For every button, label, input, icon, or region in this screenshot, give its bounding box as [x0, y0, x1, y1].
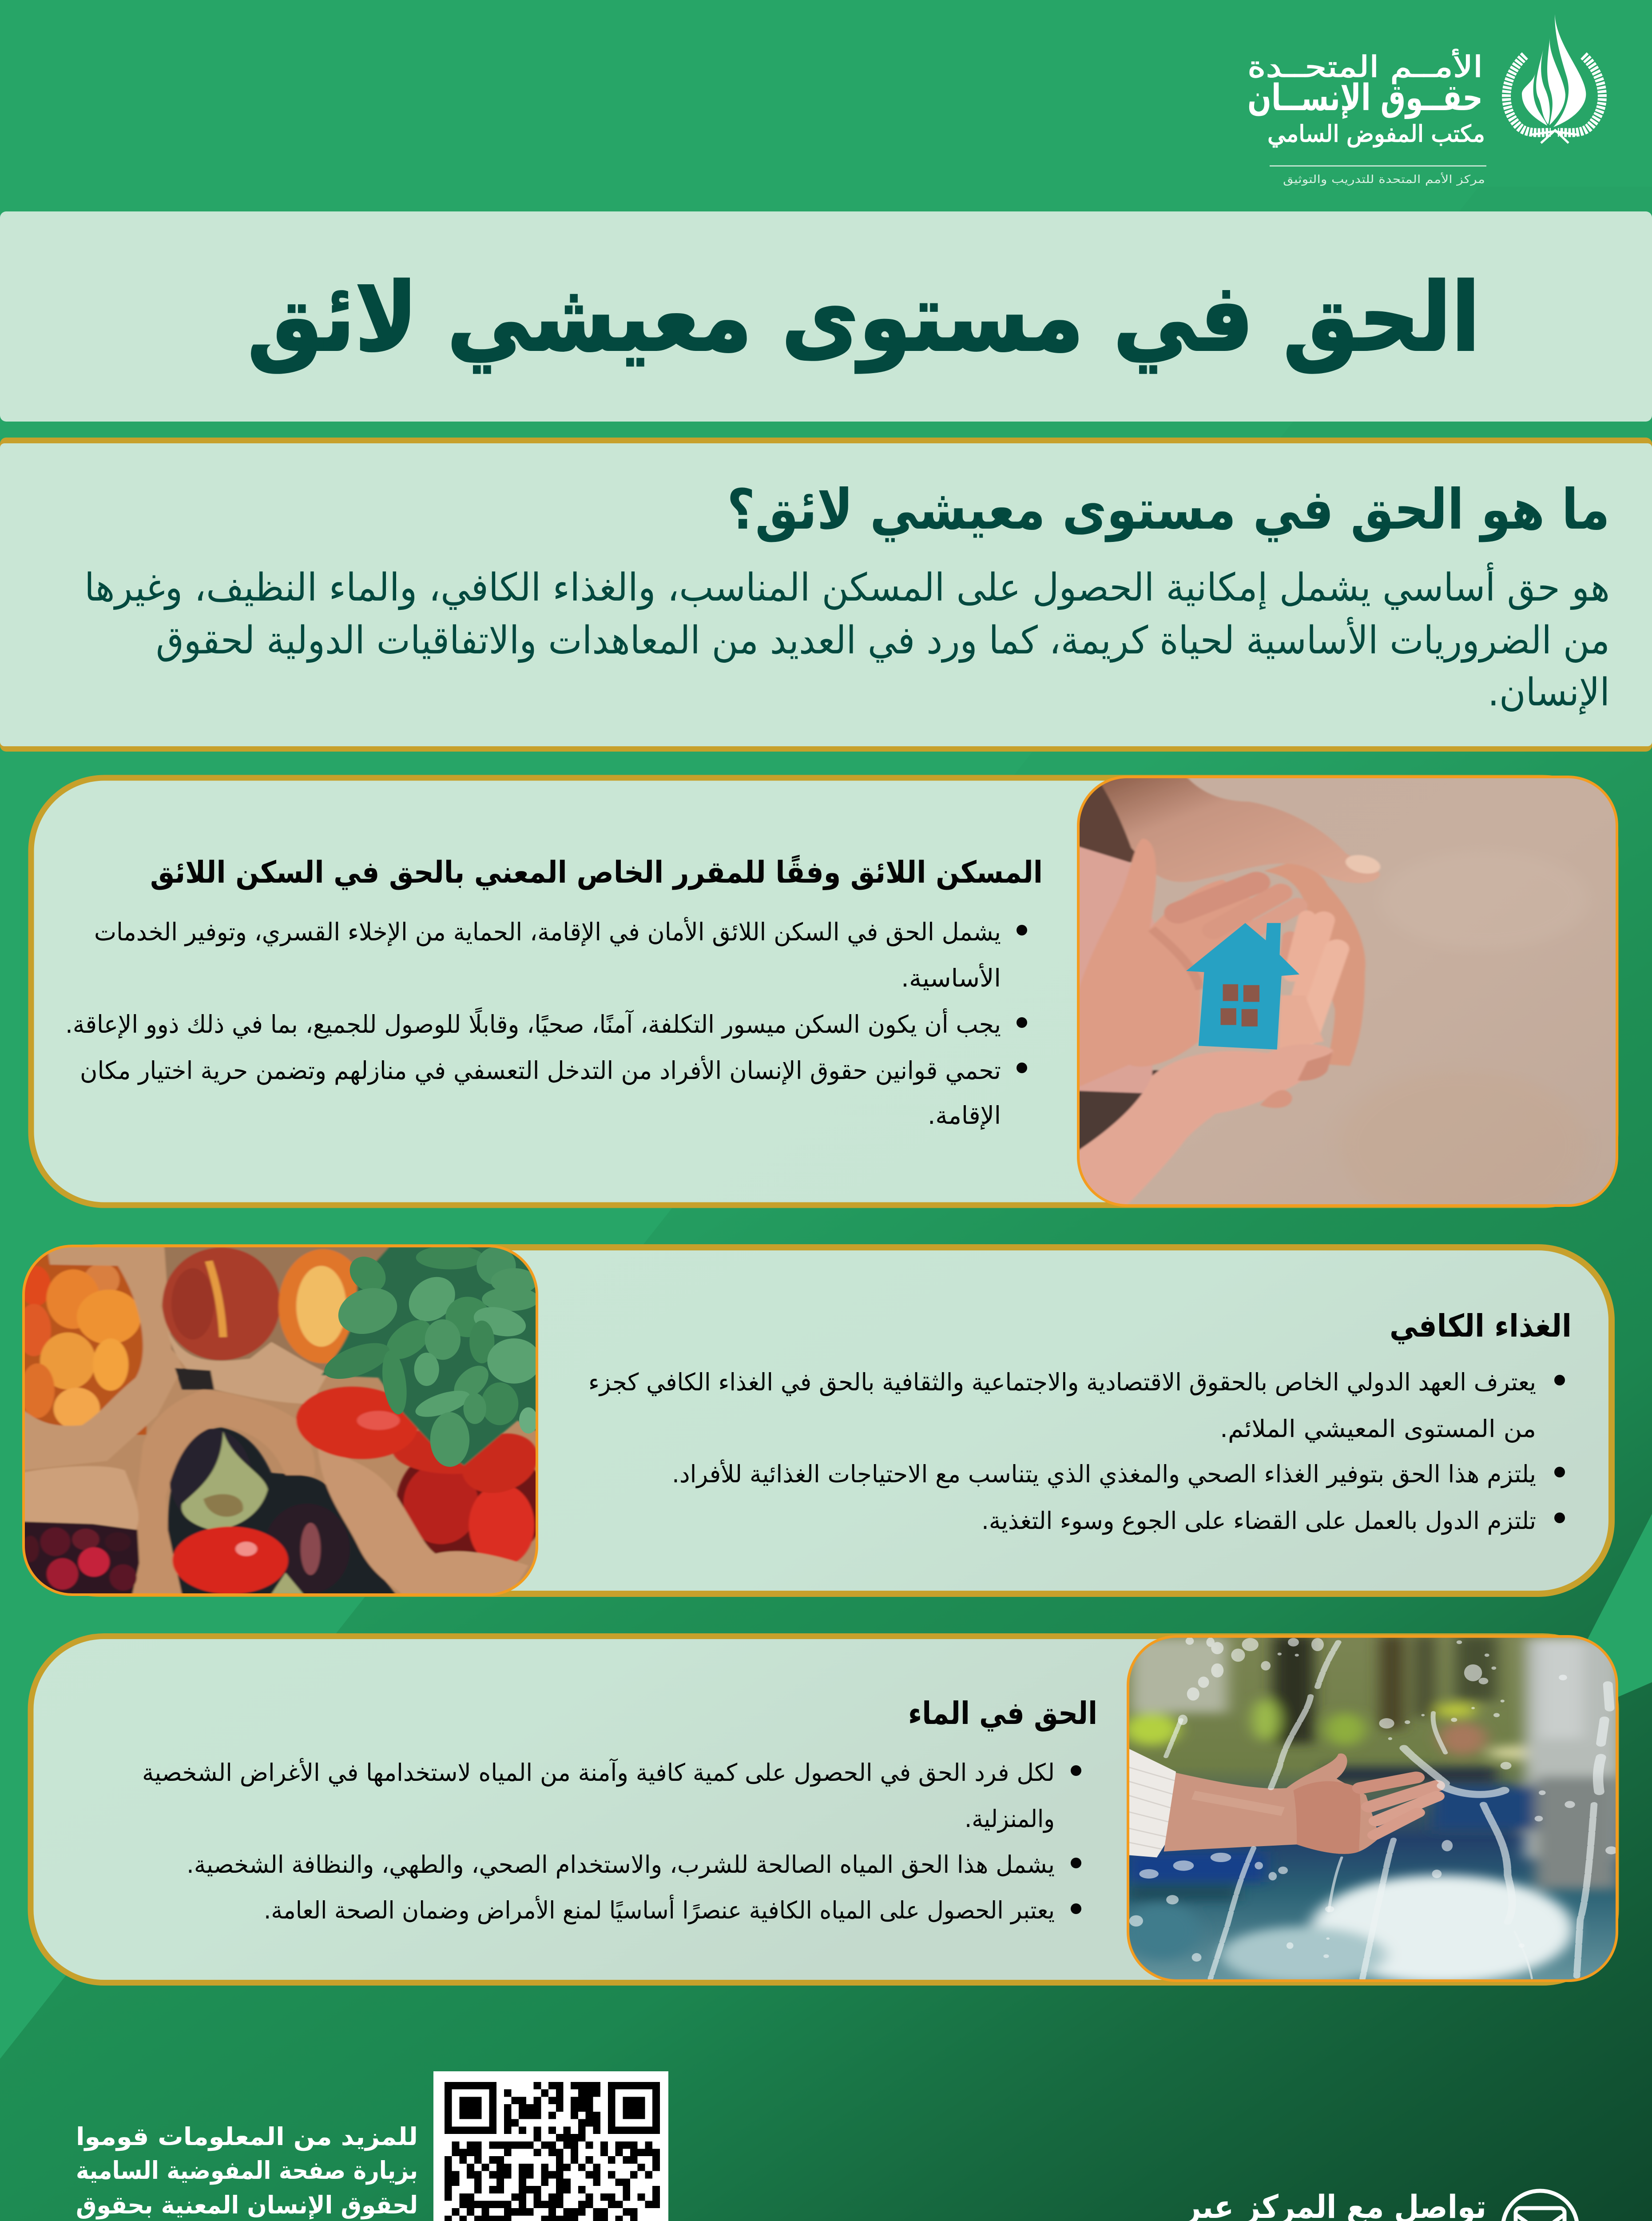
heading: right to water: الحق في الماء	[908, 1695, 1097, 1731]
text block: definition	[84, 562, 1610, 715]
bullet list: water: لكل فرد الحق في الحصول على كمية كافية وآمنة من المياه لاستخدامها في الأغراض الشخصية	[142, 1758, 1055, 1787]
bullet list: water: يعتبر الحصول على المياه الكافية عنصرًا أساسيًا لمنع الأمراض وضمان الصحة العامة.	[264, 1895, 1055, 1925]
text block: definition: الإنسان.	[1488, 670, 1610, 715]
text block: definition: هو حق أساسي يشمل إمكانية الحصول على المسكن المناسب، والغذاء الكافي، والماء النظيف، وغيرها	[84, 562, 1610, 610]
panel: right to water	[31, 1626, 1652, 1994]
text block: more information: لحقوق الإنسان المعنية بحقوق	[76, 2191, 418, 2220]
logo text: training and documentation centre: مركز الأمم المتحدة للتدريب والتوثيق	[1283, 172, 1485, 186]
text block: more information: للمزيد من المعلومات قوموا	[76, 2122, 418, 2151]
bullet list: food: يعترف العهد الدولي الخاص بالحقوق الاقتصادية والاجتماعية والثقافية بالحق في الغذاء الكافي كجزء	[588, 1368, 1536, 1397]
photo: fruit and vegetables in paper bags	[22, 1245, 538, 1596]
bullet list: housing: يجب أن يكون السكن ميسور التكلفة، آمنًا، صحيًا، وقابلًا للوصول للجميع، بما في ذلك ذوو الإعاقة.	[65, 1007, 1001, 1039]
photo: hands holding paper house	[1077, 776, 1618, 1207]
text block: definition: من الضروريات الأساسية لحياة كريمة، كما ورد في العديد من المعاهدات والاتفاقيات الدولية لحقوق	[156, 617, 1610, 663]
logo text: Human Rights: حقــوق الإنســان	[1247, 77, 1483, 119]
bullet list: water: يشمل هذا الحق المياه الصالحة للشرب، والاستخدام الصحي، والطهي، والنظافة الشخصية.	[187, 1851, 1055, 1879]
icon: UN human rights flame and laurel emblem	[1506, 14, 1602, 143]
photo: hand in fountain water	[1127, 1635, 1618, 1982]
bullet list: food: يلتزم هذا الحق بتوفير الغذاء الصحي والمغذي الذي يتناسب مع الاحتياجات الغذائية للأفراد.	[672, 1459, 1536, 1489]
bullet list: water: والمنزلية.	[965, 1805, 1055, 1833]
heading: adequate food: الغذاء الكافي	[1390, 1308, 1572, 1344]
bullet list: food: من المستوى المعيشي الملائم.	[1220, 1415, 1536, 1443]
bullet list: housing: الإقامة.	[928, 1101, 1001, 1130]
panel: what is the right	[0, 438, 1652, 752]
logo text: United Nations: الأمــم المتحــدة	[1247, 48, 1483, 84]
logo text: Office of the High Commissioner: مكتب المفوض السامي	[1267, 121, 1485, 147]
bullet list: housing: تحمي قوانين حقوق الإنسان الأفراد من التدخل التعسفي في منازلهم وتضمن حرية اختيار مكان	[80, 1055, 1001, 1085]
QR code	[433, 2071, 668, 2221]
bullet list: housing: يشمل الحق في السكن اللائق الأمان في الإقامة، الحماية من الإخلاء القسري، وتوفير الخدمات	[94, 917, 1001, 947]
text block: more information	[76, 2122, 418, 2221]
title: الحق في مستوى معيشي لائق	[247, 263, 1480, 373]
contact block	[1136, 2188, 1577, 2221]
heading: adequate housing: المسكن اللائق وفقًا للمقرر الخاص المعني بالحق في السكن اللائق	[150, 855, 1043, 890]
panel: adequate food	[0, 1235, 1612, 1608]
text block: more information: بزيارة صفحة المفوضية السامية	[76, 2156, 418, 2185]
bullet list: water	[142, 1758, 1081, 1925]
bullet list: housing: الأساسية.	[901, 963, 1001, 992]
bullet list: food: تلتزم الدول بالعمل على القضاء على الجوع وسوء التغذية.	[981, 1507, 1536, 1535]
logo: OHCHR	[1247, 14, 1602, 186]
bullet list: food	[588, 1368, 1565, 1535]
icon: envelope in circle	[1503, 2191, 1577, 2221]
bullet list: housing	[65, 917, 1027, 1130]
panel: title banner	[0, 211, 1652, 422]
panel: adequate housing	[31, 764, 1652, 1221]
